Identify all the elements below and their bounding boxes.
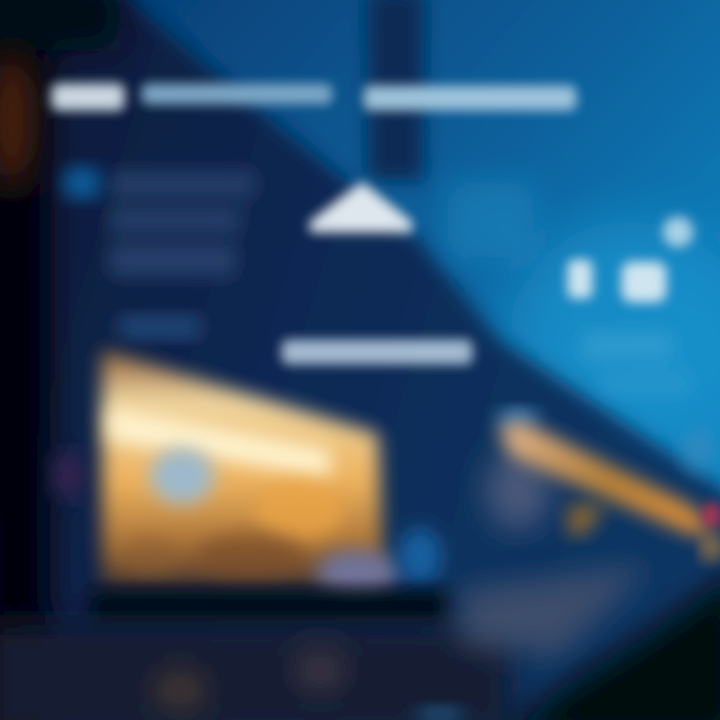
small white dot: [663, 217, 693, 247]
middle subheading: [282, 340, 472, 364]
dark foreground corner: [500, 570, 720, 720]
pink light at right edge: [702, 503, 720, 527]
lit shopfront: [102, 350, 384, 588]
bright sky glow: [510, 220, 720, 440]
orange diagonal beam: [498, 420, 715, 536]
purple-blue light at shop corner: [316, 550, 400, 594]
warm center: [256, 480, 344, 540]
blue glint on right: [682, 428, 714, 472]
purple left accent: [52, 449, 84, 501]
white triangle icon: [310, 182, 412, 232]
shop base shadow: [90, 590, 450, 624]
blue square icon: [64, 168, 100, 198]
grey street area: [460, 565, 650, 655]
title: [52, 84, 576, 110]
blue glow at shop corner: [398, 528, 442, 584]
orange light at right edge: [702, 536, 720, 560]
left dark edge: [0, 0, 50, 720]
right white figures: [568, 260, 666, 302]
warm ground reflections: [152, 648, 348, 710]
left text block: [110, 172, 255, 276]
blue window icon: [150, 448, 214, 504]
blue ground glint: [414, 707, 466, 720]
beam support: [568, 505, 606, 535]
top-left dark corner: [0, 0, 120, 50]
wet ground: [0, 625, 510, 720]
faint sky text: [445, 180, 535, 260]
right building cluster: [486, 450, 550, 530]
bright band: [108, 408, 330, 478]
brown glow at left edge: [0, 50, 34, 190]
right faint text: [582, 332, 690, 394]
shop dark figures: [195, 533, 305, 577]
small dim label: [120, 316, 200, 338]
vertical dark column: [368, 0, 424, 180]
